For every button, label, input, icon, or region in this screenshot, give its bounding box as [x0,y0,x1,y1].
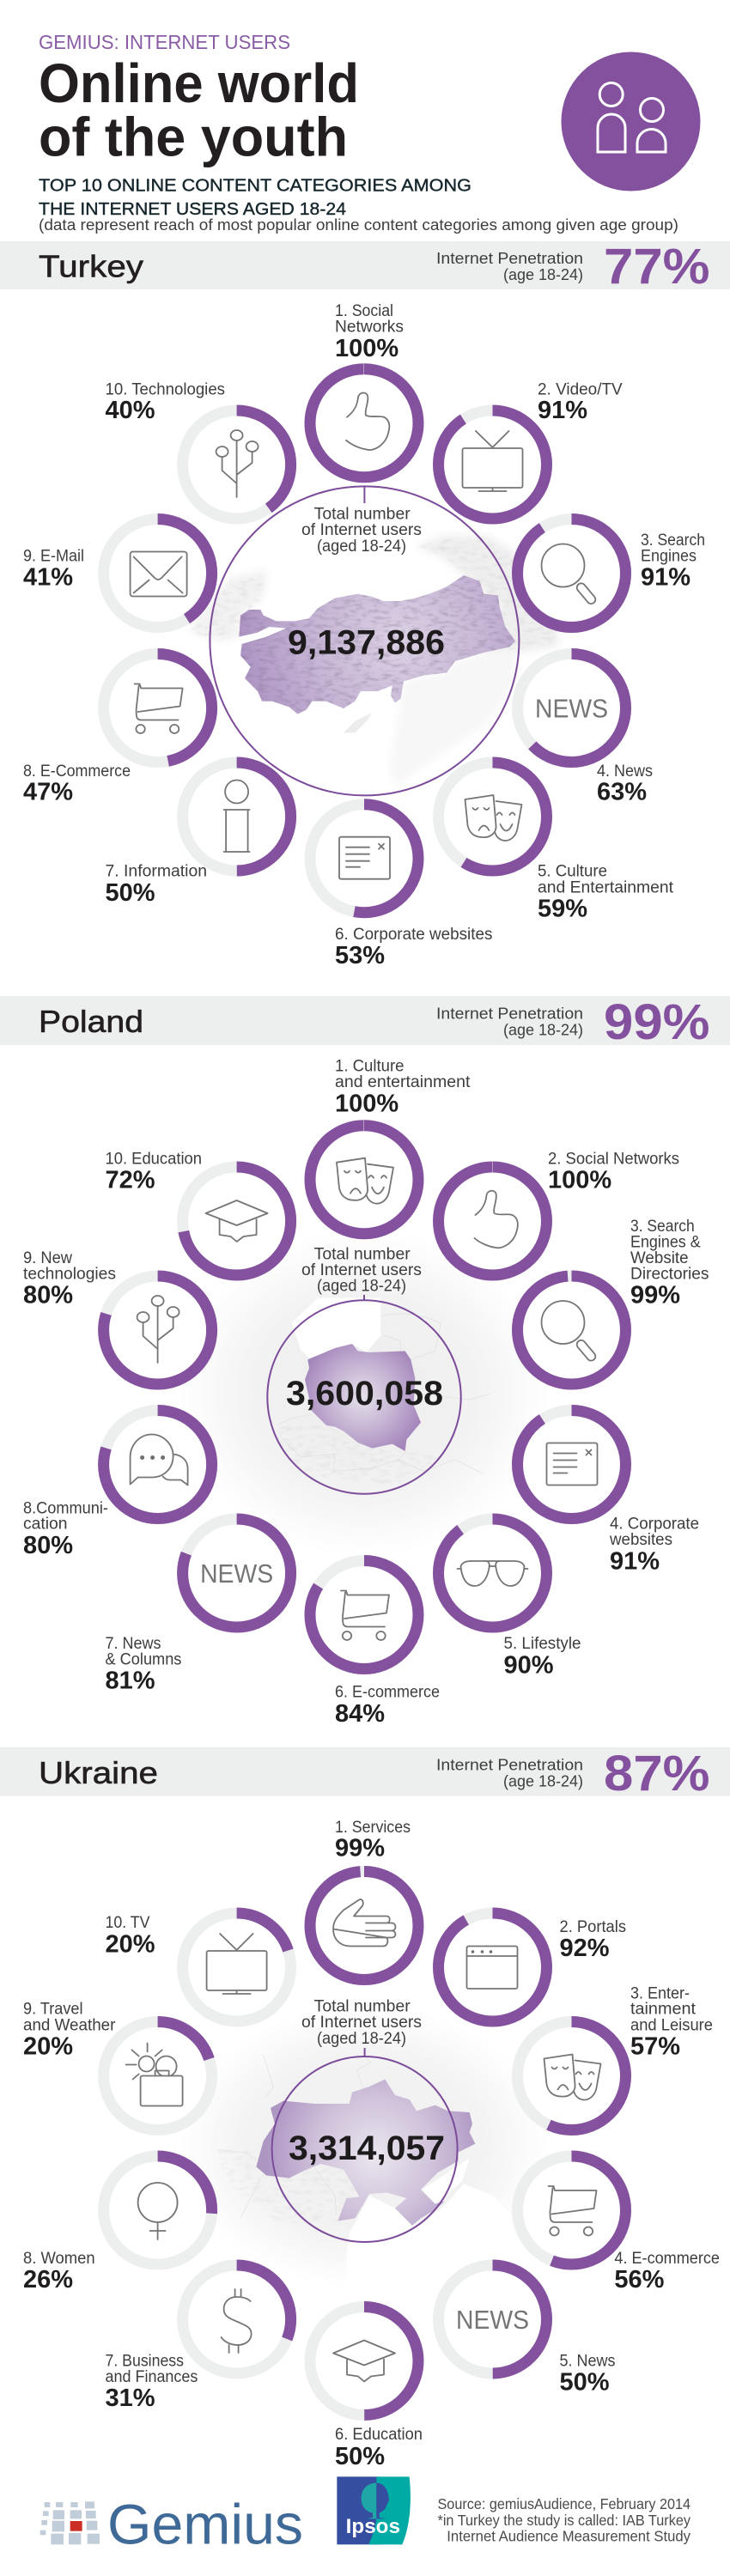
label: Portals: 92% [560,1935,610,1962]
label: Corporate websites: 6. Corporate websites [335,926,492,944]
heading band: Ukraine: Ukraine [39,1755,158,1790]
label: Lifestyle: 5. Lifestyle [503,1635,581,1653]
ring: Lifestyle 90% [438,1519,546,1627]
label: News and Columns: 81% [105,1668,155,1695]
ring: E-Commerce 47% [104,654,212,762]
heading band: Turkey: Turkey [39,249,143,284]
label: E-Commerce [23,762,131,806]
label: Social Networks: 1. Social [335,302,393,320]
ring: Social Networks 100% [310,369,418,477]
label: Social Networks: Networks [335,319,404,337]
map: Turkey with total users: Total number [314,505,411,523]
label: Video/TV: 2. Video/TV [538,380,623,398]
label: Corporate websites [609,1516,699,1575]
label: Entertainment and Leisure: 57% [630,2032,680,2060]
label: Corporate websites: 53% [335,942,385,969]
heading band: Ukraine: (age 18-24) [503,1772,583,1789]
label: Technologies: 40% [105,397,155,424]
ring: E-commerce 84% [310,1561,418,1669]
ring: Travel and Weather 20% [104,2021,212,2129]
label: Culture and entertainment: and entertainment [335,1073,471,1091]
label: Education [335,2426,423,2470]
map: Poland with total users [179,1230,549,1556]
label: E-Mail: 9. E-Mail [23,548,84,565]
label: Search Engines and Website Directories: Directories [630,1265,709,1283]
subtitle: (data represent reach of most popular online content categories among given age group) [39,216,678,234]
label: Business and Finances: 7. Business [105,2352,184,2370]
page header [39,31,701,234]
label: New technologies: technologies [23,1265,116,1283]
label: News: 63% [597,779,647,806]
ring: Information 50% [183,762,291,871]
ring: News 50%: NEWS [456,2305,529,2335]
heading band: Poland: (age 18-24) [503,1022,583,1039]
label: Culture and Entertainment: 59% [538,895,587,922]
heading band: Turkey [0,239,730,295]
ring: Culture and Entertainment 59% [438,762,546,871]
label: Entertainment and Leisure: 3. Enter- [630,1984,690,2002]
panel: Turkey [0,239,730,969]
label: Corporate websites: 4. Corporate [610,1516,699,1534]
panel: Ukraine [0,1746,730,2470]
label: Communication [23,1499,108,1559]
logo: Ipsos: Ipsos [346,2515,400,2538]
label: Social Networks: 2. Social Networks [548,1151,679,1169]
heading band: Poland: 99% [604,994,709,1050]
label: Search Engines and Website Directories: 3. Search [630,1218,695,1236]
label: Search Engines: Engines [641,548,697,565]
label: Education [105,1151,202,1194]
label: Information: 50% [105,879,155,907]
ring: Corporate websites 91% [517,1410,625,1518]
title [39,52,359,168]
label: Travel and Weather: 20% [23,2032,73,2060]
label: Entertainment and Leisure: tainment [630,2001,697,2019]
label: Portals [560,1918,626,1962]
label: E-Commerce: 47% [23,779,73,806]
label: E-Mail [23,548,84,592]
label: TV: 10. TV [105,1914,150,1932]
label: Technologies: 10. Technologies [105,380,225,398]
label: Corporate websites [335,926,492,969]
label: E-Commerce: 8. E-Commerce [23,762,131,781]
label: News: 50% [560,2368,610,2396]
label: Search Engines and Website Directories: 99% [630,1282,680,1309]
map: Turkey with total users: of Internet users [301,521,422,539]
ring: News and Columns 81% [183,1519,291,1627]
label: Portals: 2. Portals [560,1918,626,1936]
source note [438,2495,690,2545]
heading band: Poland [0,994,730,1050]
label: New technologies [23,1249,116,1309]
label: Travel and Weather: 9. Travel [23,2001,82,2019]
label: Communication: 8.Communi- [23,1499,108,1517]
label: News [597,762,653,806]
label: Search Engines and Website Directories: Engines & [630,1233,701,1251]
label: Services [335,1819,411,1862]
source note: Source: gemiusAudience, February 2014 [438,2495,690,2512]
map: Poland with total users: 3,600,058 [286,1375,443,1413]
map: Poland with total users: of Internet users [301,1261,422,1279]
label: Services: 1. Services [335,1819,411,1837]
label: E-commerce [614,2250,720,2293]
label: Lifestyle [503,1635,581,1679]
ring: Social Networks 100% [438,1167,546,1275]
ring: Video/TV 91% [438,410,546,519]
label: Business and Finances: 31% [105,2385,155,2412]
ring: News 50% [438,2265,546,2373]
label: News: 5. News [560,2352,615,2370]
logo: Ipsos [337,2476,411,2544]
label: Education: 50% [335,2443,385,2470]
footer [40,2476,690,2555]
label: Women: 8. Women [23,2250,95,2268]
label: E-commerce [335,1684,440,1728]
map: Poland with total users: Total number [314,1246,411,1264]
source note: *in Turkey the study is called: IAB Turkey [438,2512,690,2529]
heading band: Turkey: Internet Penetration [436,250,583,267]
label: Culture and entertainment: 1. Culture [335,1058,404,1076]
label: Social Networks [548,1151,679,1194]
map: Poland with total users: (aged 18-24) [317,1277,406,1295]
panel: Poland [0,994,730,1728]
label: Services: 99% [335,1835,385,1862]
label: Social Networks: 100% [335,335,398,362]
label: Social Networks [335,302,404,362]
label: E-commerce: 84% [335,1700,385,1728]
label: TV [105,1914,155,1958]
label: Culture and Entertainment: and Entertainment [538,878,674,896]
map: Ukraine with total users: of Internet users [301,2014,422,2032]
ring: Corporate websites 53% [310,805,418,913]
heading band: Ukraine: 87% [604,1746,709,1801]
label: E-Mail: 41% [23,564,73,592]
label: Search Engines [641,532,705,592]
label: Lifestyle: 90% [503,1651,554,1679]
label: Culture and Entertainment [538,863,674,922]
icon: people in purple circle [562,52,701,191]
ring: Search Engines and Website Directories 99% [517,1276,625,1384]
label: Travel and Weather: and Weather [23,2016,116,2034]
label: E-commerce: 4. E-commerce [614,2250,720,2268]
label: Culture and Entertainment: 5. Culture [538,863,607,881]
ring: Technologies 40% [183,410,291,519]
kicker: Gemius internet users: GEMIUS: INTERNET USERS [39,31,290,53]
ring: New technologies 80% [104,1276,212,1384]
ring: News 63%: NEWS [535,694,608,723]
label: Information [105,863,207,907]
source note: Internet Audience Measurement Study [447,2528,690,2545]
label: Video/TV: 91% [538,397,587,424]
ring: Search Engines 91% [517,519,625,627]
label: News and Columns: 7. News [105,1635,161,1653]
subtitle: THE INTERNET USERS AGED 18-24 [39,199,346,219]
title: of the youth [39,106,348,168]
ring: Culture and entertainment 100% [310,1126,418,1234]
ring: Portals 92% [438,1913,546,2021]
heading band: Poland: Poland [39,1004,143,1039]
label: Information: 7. Information [105,863,207,881]
ring: Business and Finances 31% [183,2265,291,2373]
ring: Services 99% [310,1872,418,1980]
map: Ukraine with total users: 3,314,057 [289,2129,445,2167]
label: Search Engines and Website Directories [630,1218,709,1309]
heading band: Turkey: (age 18-24) [503,266,583,283]
ring: News 63% [517,654,625,762]
map: Turkey with total users: (aged 18-24) [317,538,406,556]
label: Technologies [105,380,225,424]
label: News: 4. News [597,762,653,781]
subtitle [39,176,678,234]
label: Social Networks: 100% [548,1166,611,1194]
label: Business and Finances [105,2352,198,2412]
map: Ukraine with total users [179,1998,578,2288]
map: Turkey with total users: 9,137,886 [288,624,445,662]
subtitle: TOP 10 ONLINE CONTENT CATEGORIES AMONG [39,176,471,196]
label: Travel and Weather [23,2001,116,2060]
label: Search Engines: 91% [641,564,690,592]
label: Culture and entertainment: 100% [335,1090,398,1117]
map: Turkey with total users [192,486,558,795]
label: Education: 10. Education [105,1151,202,1169]
ring: E-commerce 56% [517,2156,625,2264]
title: Online world [39,52,359,114]
label: E-commerce: 6. E-commerce [335,1684,440,1702]
heading band: Ukraine [0,1746,730,1801]
label: News and Columns: & Columns [105,1651,181,1669]
map: Ukraine with total users: Total number [314,1998,411,2016]
ring: News and Columns 81%: NEWS [200,1558,273,1589]
label: New technologies: 80% [23,1282,73,1309]
label: Women: 26% [23,2266,73,2293]
ring: Women 26% [104,2156,212,2264]
heading band: Poland: Internet Penetration [436,1005,583,1023]
ring: Entertainment and Leisure 57% [517,2021,625,2129]
ring: Communication 80% [104,1410,212,1518]
label: Education: 72% [105,1166,155,1194]
label: Corporate websites: 91% [610,1547,660,1575]
label: Corporate websites: websites [609,1531,672,1549]
label: Search Engines: 3. Search [641,532,705,550]
label: Communication: 80% [23,1532,73,1559]
label: Search Engines and Website Directories: Website [630,1249,689,1267]
label: Women [23,2250,95,2293]
heading band: Turkey: 77% [604,239,709,295]
map: Ukraine with total users: (aged 18-24) [317,2030,406,2048]
label: Video/TV [538,380,623,424]
label: News and Columns [105,1635,181,1695]
label: News [560,2352,615,2396]
logo: Gemius: Gemius [107,2492,303,2555]
label: Communication: cation [23,1516,67,1534]
ring: Education 50% [310,2306,418,2415]
label: E-commerce: 56% [614,2266,665,2293]
ring: TV 20% [183,1913,291,2021]
label: Culture and entertainment [335,1058,471,1117]
label: TV: 20% [105,1930,155,1958]
label: Business and Finances: and Finances [105,2368,198,2386]
label: Entertainment and Leisure [630,1984,713,2060]
ring: E-Mail 41% [104,519,212,627]
label: Entertainment and Leisure: and Leisure [630,2016,713,2034]
label: New technologies: 9. New [23,1249,72,1267]
ring: Education 72% [183,1167,291,1275]
heading band: Ukraine: Internet Penetration [436,1757,583,1774]
label: Education: 6. Education [335,2426,423,2444]
